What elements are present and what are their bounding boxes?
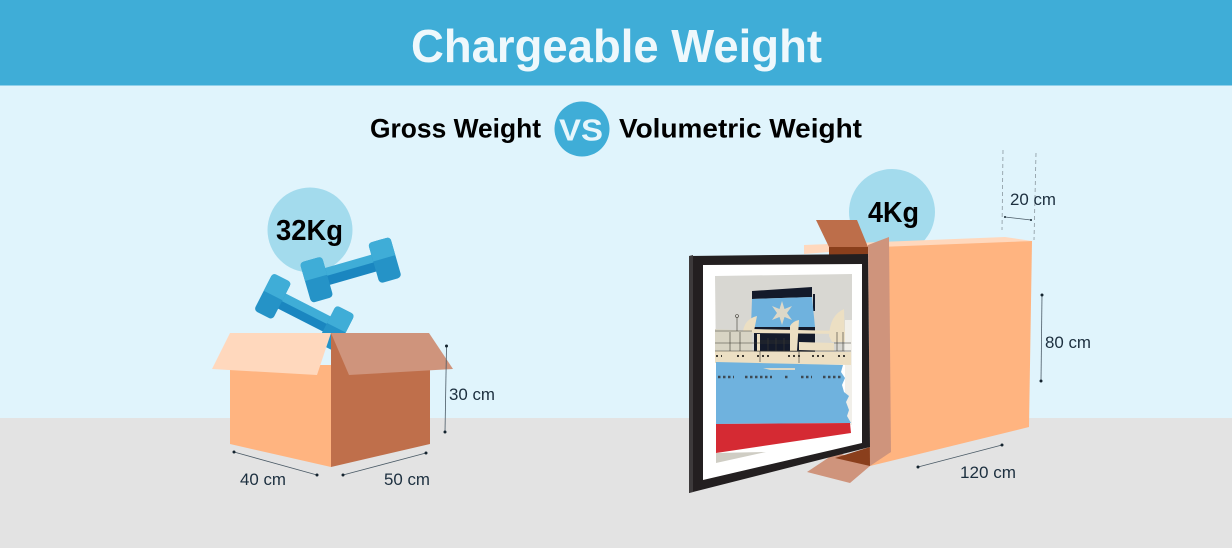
dimension: 30 cm: 30 cm [449,386,495,404]
dimension: 120 cm: 120 cm [960,464,1016,482]
box flap: rear top [816,220,868,247]
flat cardboard box [804,220,1032,483]
icon: upper dumbbell [300,237,402,303]
dimension: 20 cm [1002,150,1056,240]
box flap: bottom [807,452,870,483]
weight badge: 4Kg: 4Kg [868,197,919,229]
VS badge: VS [559,112,603,148]
deck structures [715,329,752,351]
dimension: 40 cm [232,450,318,489]
heading: volumetric weight: Volumetric Weight [619,114,862,144]
dimension: 50 cm: 50 cm [384,471,430,489]
ship hull [716,362,851,424]
dimension: 120 cm [916,444,1016,482]
open cardboard box [212,333,453,467]
box flap: inner shadow [829,247,868,256]
dimension: 80 cm: 80 cm [1045,334,1091,352]
dimension: 80 cm [1040,294,1091,382]
dimension: 30 cm [444,344,495,434]
title: Chargeable Weight [411,20,822,72]
weight badge: 32Kg [268,188,352,272]
framed ship picture [689,254,870,493]
weight badge: 32Kg: 32Kg [276,215,343,247]
VS badge [554,102,610,156]
heading: gross weight: Gross Weight [370,114,541,144]
ship illustration [715,274,852,463]
header banner [0,0,1232,86]
box flap: bottom shadow [835,447,870,466]
box flap: side [868,237,891,466]
icon: lower dumbbell [254,273,355,352]
dimension: 50 cm [342,452,430,489]
dimension: 40 cm: 40 cm [240,471,286,489]
dimension: 20 cm: 20 cm [1010,191,1056,209]
weight badge: 4Kg [849,169,935,255]
